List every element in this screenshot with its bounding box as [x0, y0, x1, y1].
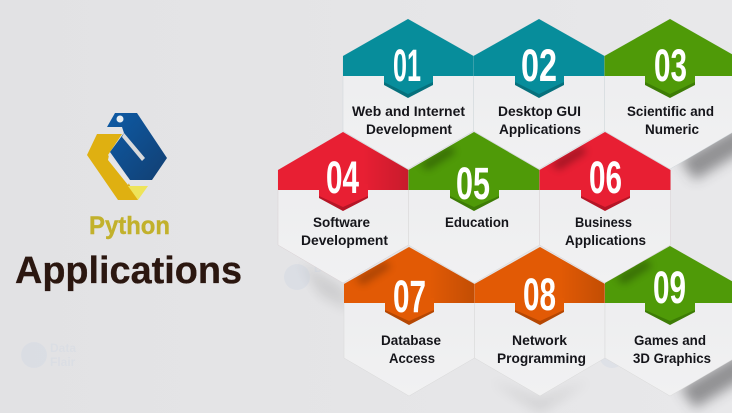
- hexagon 04: Development: [301, 232, 388, 248]
- lower slit: [108, 155, 130, 185]
- hexagon 09: 3D Graphics: [633, 350, 711, 366]
- hexagon 03: Scientific and: [627, 103, 714, 119]
- hexagon 07: Access: [389, 350, 435, 366]
- snake eye: [116, 116, 124, 122]
- watermarks: Data: [50, 341, 76, 355]
- heading: Python: Python: [89, 212, 170, 240]
- hexagon 03: Numeric: [645, 121, 699, 137]
- hexagon 04: 04: [326, 152, 359, 203]
- hexagon 06: [540, 132, 670, 283]
- hexagon 01: Web and Internet: [352, 103, 465, 119]
- hexagon 09: [605, 246, 732, 396]
- hexagon 04: Software: [313, 214, 370, 230]
- hexagon 05: [408, 132, 540, 283]
- hexagon 07: [344, 247, 474, 396]
- hexagon 04: [278, 132, 408, 283]
- hexagon 06: 06: [589, 152, 622, 203]
- blue snake body: [107, 113, 167, 180]
- hexagon 09: 09: [653, 262, 686, 313]
- shadows under hexagons: [300, 122, 732, 412]
- watermarks: Data: [314, 261, 340, 275]
- hexagon 06: Applications: [565, 232, 646, 248]
- hexagon 03: [604, 19, 732, 169]
- hexagon 06: Business: [575, 214, 632, 230]
- hexagon 02: Desktop GUI: [498, 103, 581, 119]
- watermarks: Flair: [50, 355, 76, 369]
- hexagon 08: Network: [512, 332, 567, 348]
- hexagon 08: 08: [523, 269, 556, 320]
- hexagon 05: 05: [456, 158, 490, 209]
- gold snake body: [87, 134, 138, 200]
- heading: Applications: Applications: [15, 250, 242, 292]
- yellow tail: [128, 186, 148, 200]
- hexagon 07: 07: [393, 271, 426, 322]
- hexagon 08: Programming: [497, 350, 586, 366]
- hexagon 08: [474, 247, 605, 396]
- hexagon 07: Database: [381, 332, 441, 348]
- hexagon 05: Education: [445, 214, 509, 230]
- inner slit: [122, 133, 145, 161]
- watermarks: [21, 261, 625, 369]
- hexagon 02: 02: [521, 40, 557, 91]
- logo: Python snake: [87, 113, 167, 200]
- hexagon 03: 03: [654, 40, 687, 91]
- hexagon 01: 01: [393, 40, 421, 91]
- hexagon 01: Development: [366, 121, 452, 137]
- hexagon 02: [474, 19, 604, 169]
- hexagon 02: Applications: [499, 121, 581, 137]
- hexagon 09: Games and: [634, 332, 706, 348]
- hexagon 01: [343, 19, 474, 169]
